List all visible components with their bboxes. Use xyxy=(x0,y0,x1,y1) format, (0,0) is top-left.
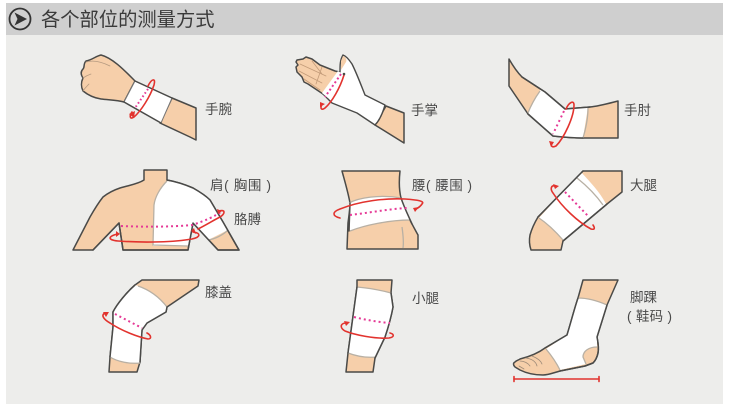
label: knee: 膝盖 xyxy=(205,285,232,300)
label: shoe size: ( 鞋码 ) xyxy=(627,309,672,324)
icon: arrow in circle xyxy=(10,8,30,30)
label: wrist: 手腕 xyxy=(205,102,232,117)
figure: ankle and foot xyxy=(514,280,618,382)
label: palm: 手掌 xyxy=(411,103,438,118)
label: calf: 小腿 xyxy=(412,291,439,306)
label: ankle: 脚踝 xyxy=(630,290,658,305)
figure: calf xyxy=(341,280,393,372)
figure: knee xyxy=(103,280,199,372)
figure: elbow xyxy=(509,59,618,147)
label: arm: 胳膊 xyxy=(234,211,261,227)
header bar xyxy=(6,3,723,35)
label: waist circumference: 腰( 腰围 ) xyxy=(412,178,472,193)
label: thigh: 大腿 xyxy=(630,178,658,193)
figure: waist xyxy=(334,171,423,249)
figure: wrist xyxy=(81,55,196,140)
figure: palm xyxy=(296,55,404,143)
label: shoulder (chest circumference): 肩( 胸围 ) xyxy=(210,178,271,193)
title: 各个部位的测量方式 xyxy=(41,9,215,31)
figure: shoulder and chest xyxy=(73,170,239,250)
label: elbow: 手肘 xyxy=(624,103,651,118)
figure: thigh xyxy=(529,171,622,250)
